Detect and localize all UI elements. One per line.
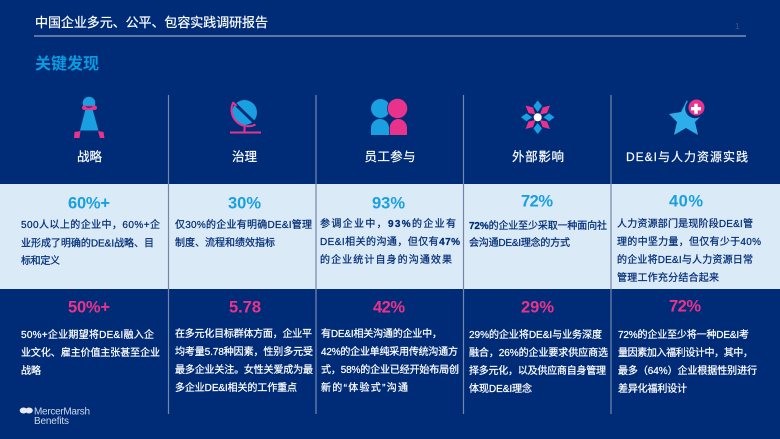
statistic: 50%+: 50%+ (68, 298, 110, 316)
logo: Mercer Marsh Benefits: MercerMarsh (34, 406, 90, 418)
finding text (21, 218, 160, 267)
statistic: 29%: 29% (521, 298, 554, 316)
logo: Mercer Marsh Benefits: Benefits (34, 416, 69, 427)
finding text: 的企业统计自身的沟通效果 (320, 253, 452, 266)
finding text (320, 217, 460, 266)
header: report title: 中国企业多元、公平、包容实践调研报告 (35, 15, 268, 30)
finding text: 500人以上的企业中，60%+企 (21, 218, 160, 231)
finding text (617, 217, 761, 284)
icon: globe (230, 100, 261, 132)
statistic: 72%: 72% (669, 298, 701, 316)
icon: two people (371, 98, 408, 135)
finding text: 新的“体验式”沟通 (321, 381, 408, 394)
statistic: 93%: 93% (372, 194, 405, 212)
finding text: 多企业DE&I相关的工作重点 (175, 381, 297, 394)
finding text (618, 328, 757, 395)
finding text: 最多（64%）企业根据性别进行 (618, 364, 757, 377)
finding text: 融合，26%的企业要求供应商选 (469, 346, 608, 359)
icon: flower (521, 100, 554, 134)
finding text (175, 218, 312, 249)
finding text: 理的中坚力量，但仅有少于40% (617, 235, 761, 248)
statistic: 72%: 72% (521, 192, 553, 210)
finding text: 战略 (21, 364, 41, 377)
statistic: 42%: 42% (373, 298, 405, 316)
label: 战略 (77, 149, 102, 164)
finding text: 42%的企业单纯采用传统沟通方 (321, 345, 458, 358)
label: 外部影响 (512, 149, 564, 164)
section heading: 关键发现 (35, 54, 99, 73)
finding text: 72%的企业至少将一种DE&I考 (618, 328, 749, 341)
finding text: 均考量5.78种因素，性别多元受 (175, 345, 313, 358)
finding text: DE&I相关的沟通，但仅有47% (320, 235, 460, 248)
page number: 1 (735, 22, 740, 31)
finding text: 最多企业关注。女性关爱成为最 (175, 363, 313, 376)
finding text (469, 328, 608, 395)
statistic: 30%: 30% (228, 194, 261, 212)
label: DE&I与人力资源实践 (626, 149, 748, 164)
statistic: 40%: 40% (669, 192, 703, 210)
finding text: 仅30%的企业有明确DE&I管理 (175, 218, 312, 231)
finding text: 参调企业中，93%的企业有 (320, 217, 456, 230)
finding text: 择多元化，以及供应商自身管理 (469, 364, 606, 377)
finding text: 人力资源部门是现阶段DE&I管 (617, 217, 753, 230)
finding text (469, 219, 607, 249)
finding text: 制度、流程和绩效指标 (175, 236, 275, 249)
finding text: 在多元化目标群体方面，企业平 (175, 327, 312, 340)
light band behind the upper statistics (0, 184, 780, 289)
icon: star with plus badge (669, 99, 705, 135)
label: 治理 (232, 150, 257, 164)
panel: 外部影响 (469, 100, 608, 395)
finding text: 差异化福利设计 (618, 382, 687, 395)
finding text (175, 327, 313, 394)
label: 员工参与 (364, 149, 416, 164)
finding text: 29%的企业将DE&I与业务深度 (469, 328, 602, 341)
finding text: 72%的企业至少采取一种面向社 (469, 219, 607, 232)
icon: chess pawn (74, 97, 104, 138)
finding text: 式，58%的企业已经开始布局创 (321, 363, 459, 376)
finding text: 管理工作充分结合起来 (617, 271, 719, 284)
panel: 战略 (21, 97, 160, 377)
finding text: 标和定义 (21, 254, 60, 267)
finding text: 业文化、雇主价值主张甚至企业 (21, 346, 160, 359)
finding text (21, 328, 160, 377)
finding text: 体现DE&I理念 (469, 382, 532, 395)
finding text: 50%+企业期望将DE&I融入企 (21, 328, 154, 341)
finding text (321, 327, 459, 394)
finding text: 业形成了明确的DE&I战略、目 (21, 236, 154, 250)
logo: Mercer Marsh Benefits (20, 406, 90, 427)
statistic: 60%+: 60%+ (68, 194, 110, 212)
panel: 治理 (175, 100, 313, 394)
panel: 员工参与 (320, 98, 460, 394)
panel: DE&I与人力资源实践 (617, 99, 761, 395)
finding text: 的企业将DE&I与人力资源日常 (617, 253, 753, 266)
finding text: 有DE&I相关沟通的企业中， (321, 327, 442, 340)
finding text: 量因素加入福利设计中，其中， (618, 346, 753, 359)
finding text: 会沟通DE&I理念的方式 (469, 236, 570, 249)
statistic: 5.78: 5.78 (229, 298, 261, 316)
